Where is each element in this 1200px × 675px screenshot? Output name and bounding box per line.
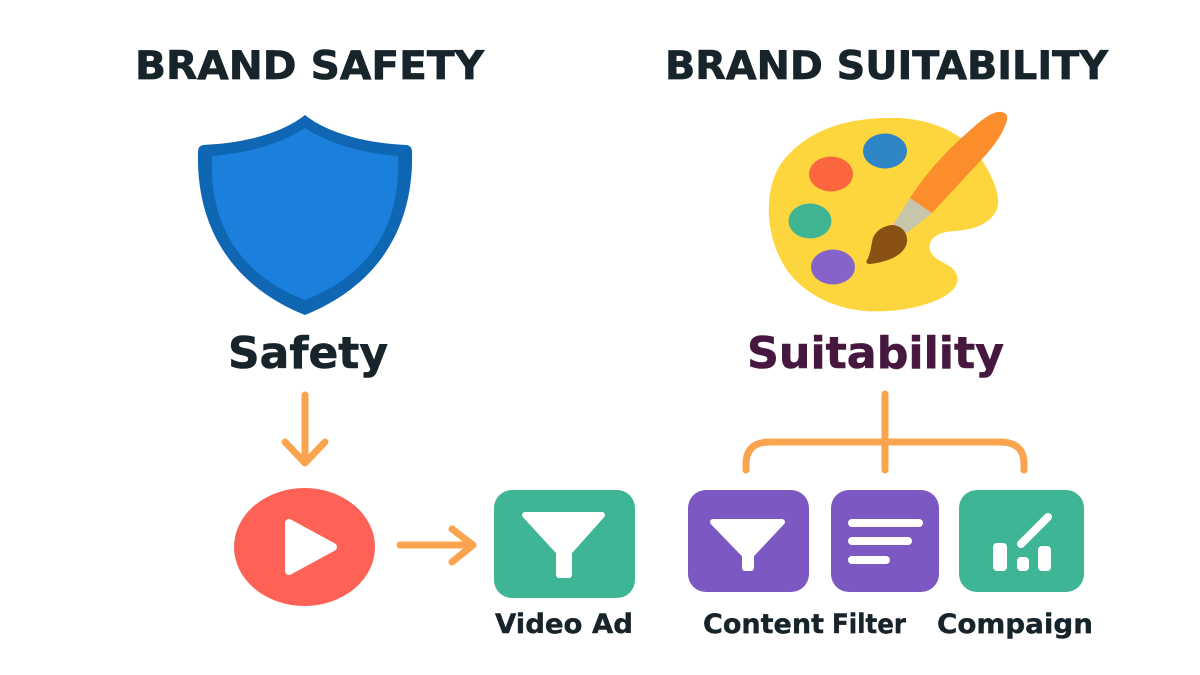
- brush ferrule: [893, 198, 932, 233]
- heading: brand suitability: BRAND SUITABILITY: [665, 44, 1109, 89]
- label: campaign: Compaign: [937, 609, 1093, 640]
- icon: paint palette: [769, 112, 1007, 311]
- label: content filter: Content: [703, 609, 824, 640]
- icon: purple filter lines tile: [831, 490, 939, 592]
- brush handle: [910, 112, 1007, 213]
- arrow: play to funnel: [400, 529, 473, 562]
- brush tip: [866, 225, 907, 264]
- arrow: safety to play: [285, 395, 325, 463]
- icon: green chart tile: [959, 490, 1084, 592]
- paint: blue: [863, 134, 907, 168]
- paint: green: [788, 204, 832, 238]
- paint: purple: [811, 250, 855, 284]
- icon: purple funnel tile: [688, 490, 809, 592]
- label: content filter: Filter: [832, 609, 907, 640]
- icon: green funnel tile: [494, 490, 635, 598]
- paint: red: [809, 156, 853, 192]
- heading: brand safety: BRAND SAFETY: [135, 44, 485, 89]
- label: safety: Safety: [228, 328, 388, 379]
- icon: shield: [198, 115, 412, 315]
- bracket: suitability branches: [746, 394, 1024, 470]
- label: video ad: Video Ad: [495, 609, 633, 640]
- icon: play button: [234, 488, 375, 606]
- label: suitability: Suitability: [747, 328, 1004, 379]
